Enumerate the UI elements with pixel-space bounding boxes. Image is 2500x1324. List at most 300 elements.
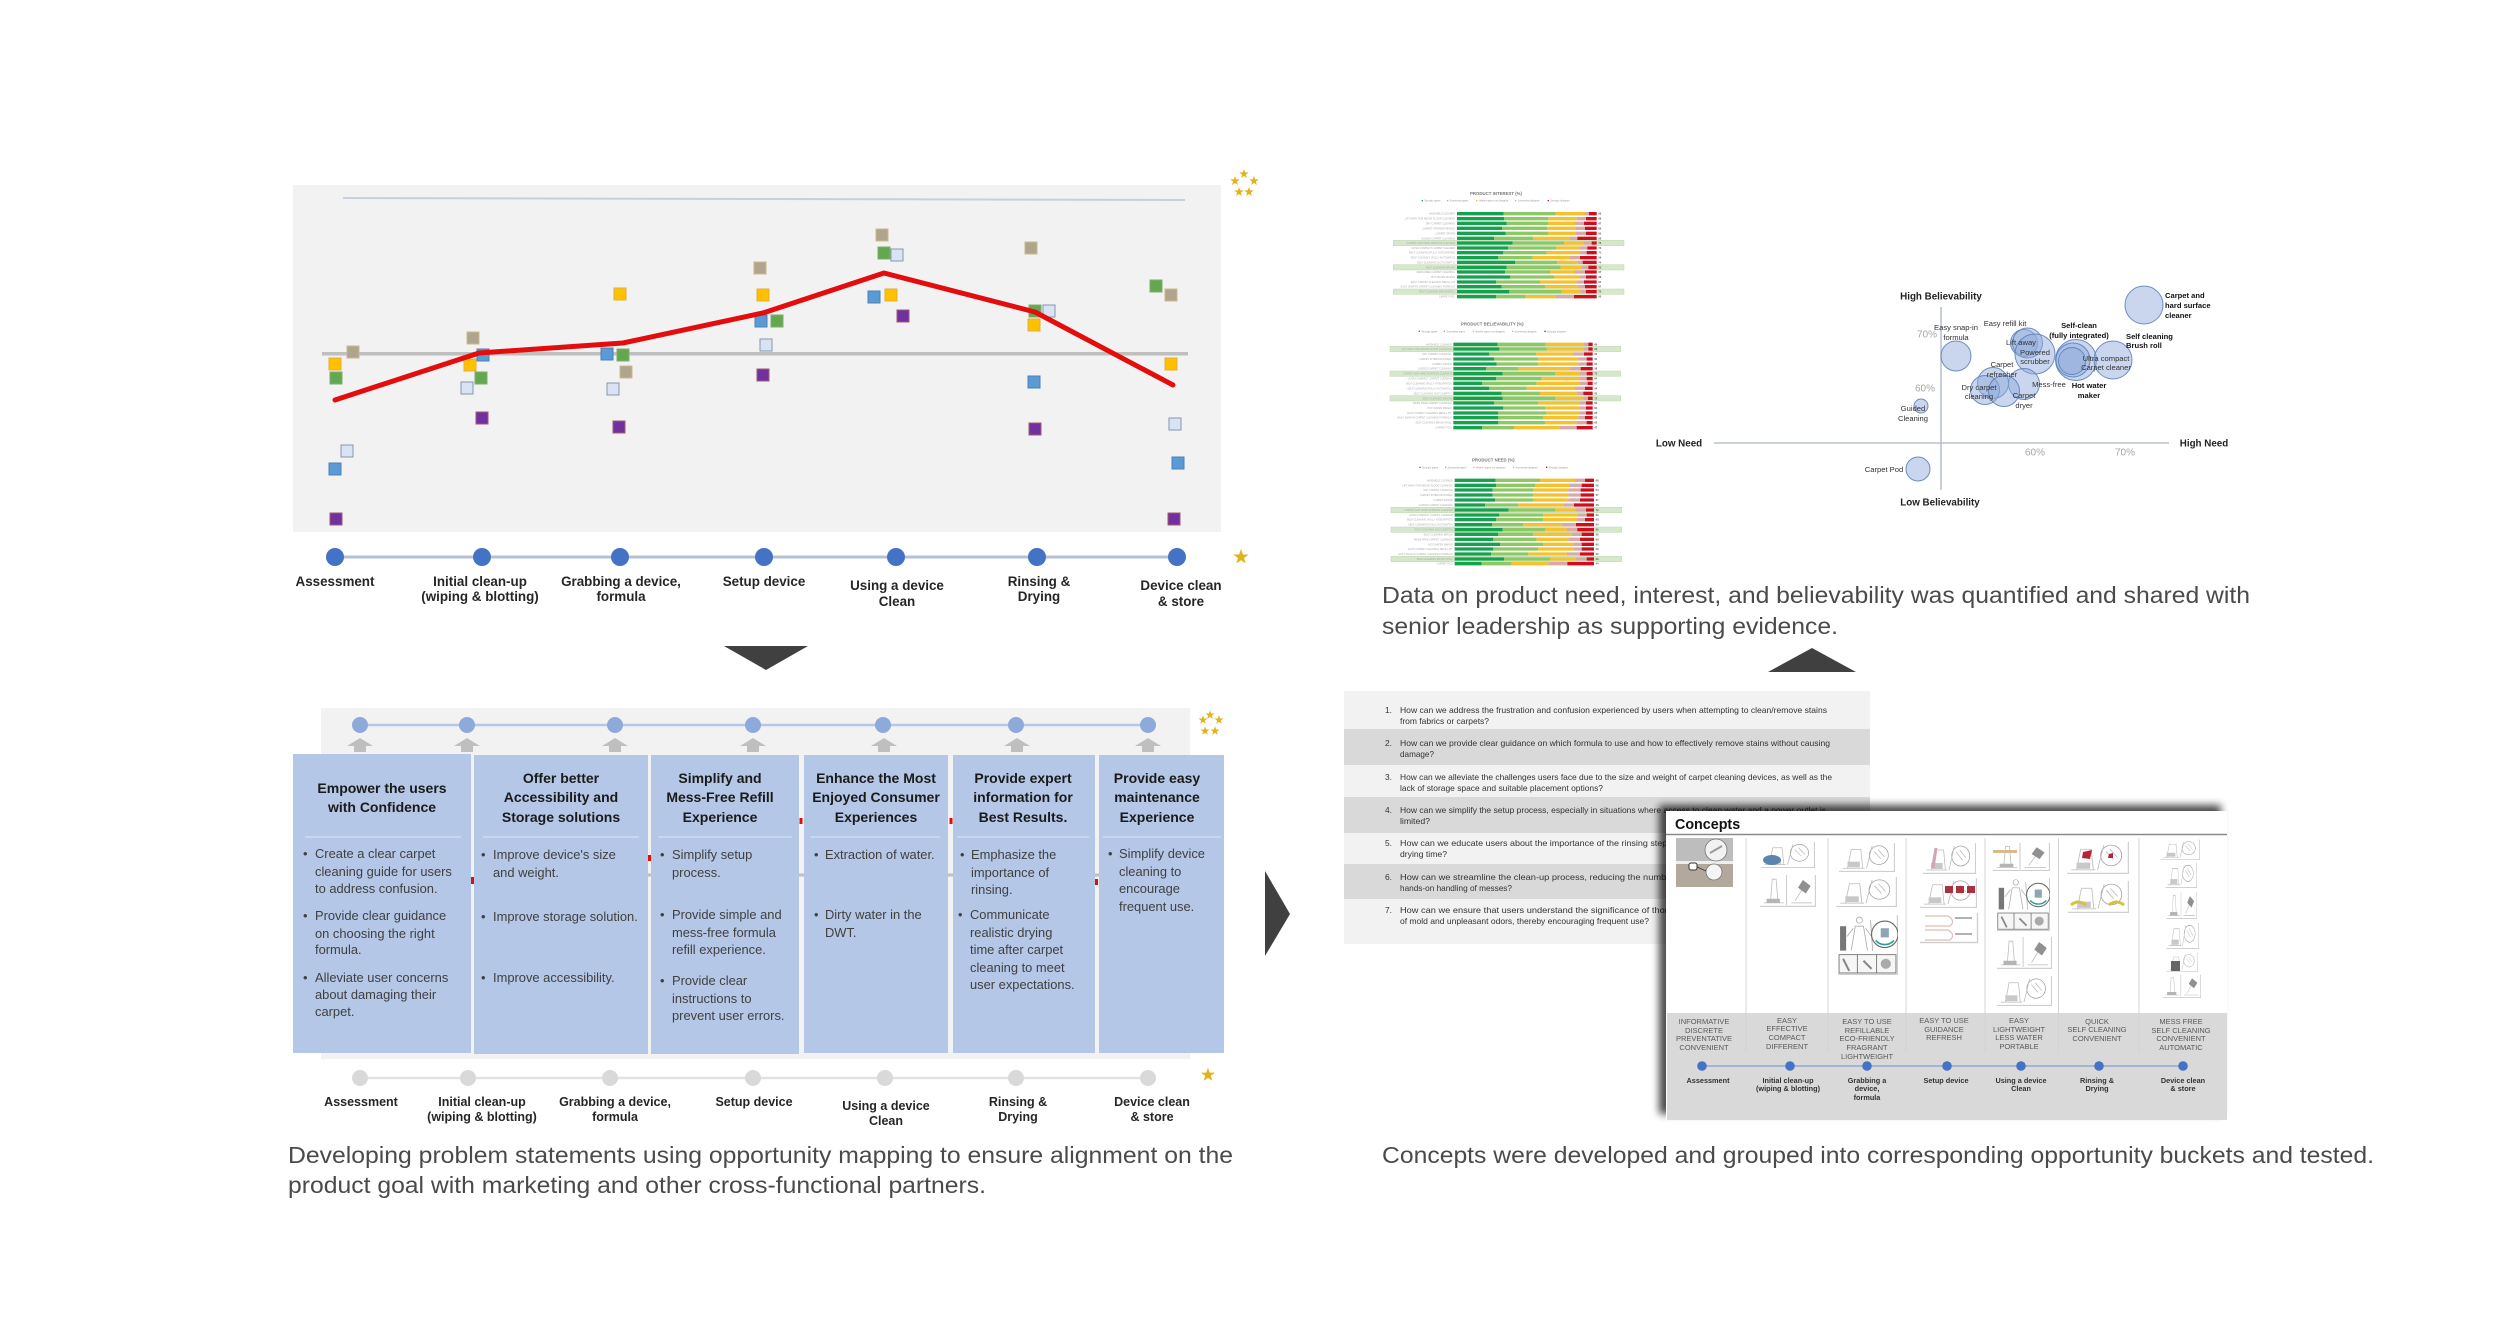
panel: simplify refill [651,755,799,1054]
chart: product believability stacked bars: 64 [1594,406,1598,410]
bullet text: Improve storage solution. [493,909,638,924]
data markers: rinsing and drying [1025,242,1055,435]
chart: product interest stacked bars: SELF CLEANING BRUSH ROLL [1419,291,1456,294]
heading: Offer better [523,770,600,786]
question 2: 2. [1385,738,1392,748]
chart: product believability stacked bars: GUIDED CARPET CLEANING [1418,368,1452,371]
question 2: How can we provide clear guidance on which formula to use and how to effectively remove stains without causing [1400,738,1830,748]
bullet text: mess-free formula [672,925,777,940]
chart reference line: top [343,198,1185,200]
journey stage labels top: Grabbing a device, [561,574,681,589]
bullet text: • [303,908,308,923]
concepts stage labels: & store [2170,1084,2196,1093]
chart: product need stacked bars: GUIDED CARPET CLEANING [1419,504,1453,507]
bullet text: Communicate [970,907,1050,922]
concepts stage labels: Setup device [1923,1076,1969,1085]
concepts stage labels: formula [1854,1093,1881,1102]
caption: data quantified: senior leadership as supporting evidence. [1382,613,1838,639]
heading: Best Results. [979,809,1067,825]
chart: product need stacked bars: SELF CLEANING BRUSH [1424,533,1453,536]
bullet text: prevent user errors. [672,1008,784,1023]
chart: product need stacked bars: 50 [1596,523,1599,527]
concepts stage labels: Assessment [1686,1076,1730,1085]
bullet text: • [481,847,486,862]
panel: expert information [953,755,1095,1053]
question 1 [1385,705,1827,726]
question 5: How can we educate users about the importance of the rinsing step and provide realistic expectations for the [1400,838,1830,848]
question 3: lack of storage space and suitable placement options? [1400,783,1603,793]
bubble labels: cleaner [2165,311,2192,320]
bullet text: • [303,846,308,861]
chart: product need stacked bars: CARPET AND HARD SURFACE CLEANER [1404,509,1453,512]
chart: product interest stacked bars: 67 [1598,221,1602,225]
chart: product believability stacked bars: 54 [1594,386,1598,390]
bullet text: DWT. [825,925,857,940]
chart: product believability stacked bars: 61 [1594,362,1598,366]
caption: opportunity mapping: product goal with marketing and other cross-functional partners. [288,1172,986,1198]
chart: product believability stacked bars: 63 [1594,391,1598,395]
chart: product need stacked bars: 60 [1596,528,1599,532]
bullet text: rinsing. [971,882,1013,897]
bubble labels: Easy snap-in [1934,323,1978,332]
panel: concepts [1666,811,2227,1120]
chart: product need stacked bars: 52 [1596,552,1599,556]
panel: easy maintenance [1099,755,1224,1053]
chart: product need stacked bars: 46 [1596,503,1599,507]
chart: product need stacked bars: EASY CARPET CLEANING REFILL KIT [1408,548,1453,551]
chart: product interest stacked bars: HANDHELD CLEANER [1429,213,1455,216]
heading: Enjoyed Consumer [812,789,940,805]
bullet text: Alleviate user concerns [315,970,448,985]
chart: product need stacked bars: 54 [1596,488,1599,492]
chart: product interest stacked bars: 74 [1598,260,1602,264]
bullet text: Create a clear carpet [315,846,436,861]
bubble labels: dryer [2015,401,2033,410]
bullet text: Simplify setup [672,847,752,862]
concept thumbnails: device clean and store [2160,839,2201,998]
journey stage labels top: Assessment [296,574,375,589]
bubble labels: Carpet Pod [1865,465,1903,474]
chart: product interest stacked bars: 76 [1598,241,1602,245]
question 5: 5. [1385,838,1392,848]
question 7 [1385,905,1830,926]
caption: opportunity mapping [288,1142,1233,1198]
heading: Simplify and [678,770,762,786]
bubble labels: Powered [2020,348,2050,357]
bullet text: • [958,907,963,922]
bullet text: Improve device's size [493,847,616,862]
concept attribute labels: LIGHTWEIGHT [1841,1052,1893,1061]
concept attribute labels: EASY TO USE [1919,1016,1969,1025]
chart: product interest stacked bars: 68 [1598,275,1602,279]
concept thumbnails: initial clean-up [1759,841,1816,907]
question 5 [1385,838,1830,859]
bubble labels: Carpet cleaner [2081,363,2131,372]
bullet text: • [660,973,665,988]
journey stage labels bottom [324,1095,1190,1128]
question 4: How can we simplify the setup process, especially in situations where access to clean water and a power outlet is [1400,805,1826,815]
heading: Accessibility and [504,789,618,805]
chart: product interest stacked bars: 61 [1598,280,1602,284]
bubble labels: Lift away [2006,338,2036,347]
chart: product believability stacked bars: HANDHELD CLEANER [1426,343,1452,346]
concept thumbnails: setup device [1919,842,1978,943]
data markers: assessment [329,346,359,525]
chart: product need stacked bars: 63 [1596,518,1599,522]
chart: product believability stacked bars: 73 [1594,372,1598,376]
question 7: How can we ensure that users understand the significance of thorough cleaning for preventing the growth [1400,905,1830,915]
heading: Provide expert [974,770,1072,786]
opportunity timeline bottom [352,1070,1156,1086]
concept attribute labels [1676,1016,2211,1061]
bubble labels: Carpet [1991,360,2014,369]
journey stage labels bottom: Device clean [1114,1095,1190,1109]
question 6: hands-on handling of messes? [1400,883,1512,893]
chart: product believability stacked bars: EASY CARPET CLEANING REFILL KIT [1407,412,1452,415]
arrow: down [724,646,808,670]
journey stage labels top: Clean [879,594,915,609]
chart: product interest stacked bars: CARPET AND HARD SURFACE CLEANER [1407,242,1455,245]
chart: product need stacked bars: EASY SNAP-IN CARPET CLEANING FORMULA [1398,553,1453,556]
question 3: 3. [1385,772,1392,782]
bullet text: process. [672,865,721,880]
chart: product believability stacked bars: 72 [1594,396,1598,400]
chart: product need stacked bars: 57 [1596,498,1599,502]
concepts stage labels [1686,1076,2205,1102]
heading: Experiences [835,809,917,825]
chart: product interest stacked bars: ULTRA COMPACT CARPET CLEANER [1411,247,1455,250]
bullet text: instructions to [672,991,752,1006]
concept attribute labels: EASY [2009,1016,2029,1025]
journey stage labels top: Using a device [850,578,944,593]
chart: product need stacked bars: HANDHELD CLEANER [1427,479,1453,482]
bullet text: • [814,907,819,922]
heading: information for [973,789,1073,805]
chart: product interest stacked bars: EASY CARPET CLEANING REFILL KIT [1411,281,1455,284]
panel shadow: concepts [1659,805,2221,1114]
bullet text: user expectations. [970,977,1075,992]
caption: opportunity mapping: Developing problem statements using opportunity mapping to ensure alignment on the [288,1142,1233,1168]
chart: product interest stacked bars: CARPET INTERIOR RINSES [1422,227,1455,230]
journey stage labels top: Setup device [723,574,805,589]
chart: product interest stacked bars: Strongly agree [1424,200,1441,203]
data markers: using a device [868,229,909,322]
chart: product need stacked bars: SELF CLEANING (AUTO EMPTY) [1415,529,1453,532]
bubble labels: refresher [1987,370,2018,379]
question 1: 1. [1385,705,1392,715]
panel: empower the users [293,754,471,1053]
bullet text: on choosing the right [315,926,435,941]
residual gray and red line fragments between columns [472,818,1099,885]
gray label band [1667,1013,2227,1120]
bullet text: importance of [971,865,1050,880]
chart: product need stacked bars: Strongly disagree [1549,466,1569,469]
bullet text: • [660,847,665,862]
journey stage labels top: Drying [1018,589,1060,604]
chart: product need stacked bars: CARPET POD [1437,563,1453,566]
chart: product believability stacked bars: 65 [1594,421,1598,425]
chart: product believability stacked bars: CARPET INTERIOR RINSES [1419,358,1452,361]
tick labels: 70% [2115,448,2135,458]
chart: product need stacked bars: 56 [1596,483,1599,487]
chart: product interest stacked bars: SELF CLEANING BRUSH [1426,266,1455,269]
bubble labels: Ultra compact [2083,354,2130,363]
question 4 [1385,805,1826,826]
chart: product need stacked bars: 59 [1596,547,1599,551]
concept attribute labels: REFILLABLE [1845,1026,1889,1035]
chart: product need stacked bars: SELF CLEANING (FULLY AUTOMATIC) [1408,524,1453,527]
chart: product believability stacked bars: Somewhat disagree [1515,330,1537,333]
chart: product interest stacked bars: HOT WATER MAKER [1431,276,1455,279]
bullet text: realistic drying [970,925,1052,940]
chart: product believability stacked bars: 60 [1594,401,1598,405]
journey stage labels top: formula [596,589,646,604]
bullet text: refill experience. [672,942,766,957]
bullet text: encourage [1119,881,1180,896]
chart: product believability stacked bars: SELF CLEANING (FULLY INTEGRATED) [1406,382,1452,385]
red trend line [335,273,1173,400]
journey stage labels bottom: Initial clean-up [438,1095,526,1109]
bullet text: Provide clear [672,973,748,988]
chart: product believability stacked bars: 66 [1594,411,1598,415]
axis labels: Low Believability [1900,498,1980,508]
bubble labels: Self-clean [2061,321,2097,330]
chart: product believability stacked bars: 69 [1594,342,1598,346]
journey stage labels bottom: Drying [998,1110,1038,1124]
bubble labels: maker [2078,391,2100,400]
concept attribute labels: EFFECTIVE [1766,1024,1808,1033]
concepts stage labels: Clean [2011,1084,2031,1093]
highlighted rows [1390,346,1621,401]
question 6: 6. [1385,872,1392,882]
chart: product interest stacked bars: Neither agree nor disagree [1479,200,1509,203]
chart: product interest stacked bars: Somewhat agree [1450,200,1469,203]
concept attribute labels: REFRESH [1926,1033,1962,1042]
journey stage labels bottom: Using a device [842,1099,930,1113]
concept thumbnails: grabbing a device [1835,842,1898,975]
bullet text: cleaning guide for users [315,864,452,879]
chart: product need stacked bars: SELF CLEANING BRUSH ROLL [1416,558,1453,561]
concept attribute labels: LESS WATER [1995,1033,2043,1042]
chart: product believability stacked bars: 64 [1594,377,1598,381]
heading: Provide easy [1114,770,1200,786]
concept attribute labels: GUIDANCE [1924,1025,1964,1034]
chart: product believability stacked bars: 67 [1594,381,1598,385]
icon: single star top timeline [1233,549,1249,563]
heading: Experience [683,809,758,825]
concept attribute labels: DIFFERENT [1766,1042,1808,1051]
bubble labels: Dry carpet [1961,383,1997,392]
bubble labels: Carpet [2013,391,2036,400]
chart: product interest stacked bars: LIFT AWAY FOR ABOVE FLOOR CLEANING [1405,218,1455,221]
chart: product interest stacked bars: GUIDED CARPET CLEANING [1421,237,1455,240]
chart: product believability stacked bars [1390,322,1621,430]
chart: product need stacked bars: HOT WATER MAKER [1429,543,1453,546]
chart: product believability stacked bars: CARPET POD [1436,427,1452,430]
bullet text: and weight. [493,865,559,880]
journey stage labels bottom: & store [1130,1110,1174,1124]
icons: gray up arrows [347,738,1161,752]
chart: product interest stacked bars: EASY SNAP-IN CARPET CLEANING FORMULA [1401,286,1455,289]
chart: product need stacked bars: LIFT AWAY FOR ABOVE FLOOR CLEANING [1402,484,1453,487]
bullet text: • [303,970,308,985]
bullet text: • [481,970,486,985]
caption: concepts developed: Concepts were developed and grouped into corresponding opportunity buckets and tested. [1382,1142,2374,1168]
heading: with Confidence [327,799,436,815]
chart: product believability stacked bars: SELF CLEANING (AUTO EMPTY) [1414,392,1452,395]
bubble labels: Carpet and [2165,291,2205,300]
journey stage labels bottom: Grabbing a device, [559,1095,671,1109]
bubble labels: Easy refill kit [1984,319,2027,328]
icon: five stars opportunity map [1198,710,1224,735]
axis labels: High Believability [1900,292,1982,302]
heading: Empower the users [317,780,447,796]
concepts stage labels: (wiping & blotting) [1756,1084,1821,1093]
heading: Storage solutions [502,809,620,825]
bubbles [1906,286,2163,481]
chart: product need stacked bars: 59 [1596,537,1599,541]
bubble labels: Cleaning [1898,414,1928,423]
concept attribute labels: EASY TO USE [1842,1017,1892,1026]
question 1: How can we address the frustration and confusion experienced by users when attempting to clean/remove stains [1400,705,1827,715]
concepts stage labels: Grabbing a [1848,1076,1887,1085]
chart: product interest stacked bars: SELF CLEANING (FULLY INTEGRATED) [1409,252,1455,255]
bullet text: cleaning to meet [970,960,1065,975]
bullet text: Provide clear guidance [315,908,446,923]
chart: product believability stacked bars: HOT WATER MAKER [1428,407,1452,410]
chart: product need stacked bars: CARPET DRYER [1433,499,1453,502]
chart: product interest stacked bars: DRY CARPET CLEANING [1426,222,1455,225]
bubble labels: Self cleaning [2126,332,2173,341]
bullet text [660,847,784,1023]
concept attribute labels: LIGHTWEIGHT [1993,1025,2045,1034]
bullet text: • [814,847,819,862]
journey stage labels bottom: formula [592,1110,639,1124]
axis labels [1656,292,2228,508]
bullet text: Simplify device [1119,846,1205,861]
bullet text: time after carpet [970,942,1064,957]
concepts stage labels: Rinsing & [2080,1076,2115,1085]
chart: product believability stacked bars: 65 [1594,416,1598,420]
concept attribute labels: QUICK [2085,1017,2109,1026]
chart: product interest stacked bars: 71 [1598,251,1602,255]
chart: product believability stacked bars: CARPET AND HARD SURFACE CLEANER [1403,373,1452,376]
chart: product need stacked bars: SELF CLEANING (FULLY INTEGRATED) [1407,519,1453,522]
question 7: 7. [1385,905,1392,915]
bullet text [814,847,935,940]
bullet text: Dirty water in the [825,907,922,922]
chart: product need stacked bars [1391,458,1622,566]
chart: product need stacked bars: ULTRA COMPACT CARPET CLEANER [1409,514,1453,517]
journey stage labels bottom: Setup device [715,1095,793,1109]
journey stage labels top: Device clean [1140,578,1222,593]
heading [666,770,774,825]
chart: product interest stacked bars: 68 [1598,217,1602,221]
chart: product interest stacked bars: MESS FREE CARPET CLEANING [1417,271,1455,274]
chart: product interest stacked bars: SELF CLEANING (FULLY AUTOMATIC) [1411,257,1455,260]
concept attribute labels: CONVENIENT [2072,1034,2122,1043]
chart: product need stacked bars: 56 [1596,532,1599,536]
chart: product interest stacked bars: PRODUCT INTEREST (%) [1470,191,1523,196]
bullet text: frequent use. [1119,899,1194,914]
bullet text: • [1108,846,1113,861]
chart: product believability stacked bars: LIFT AWAY FOR ABOVE FLOOR CLEANING [1401,348,1452,351]
concept thumbnails: rinsing and drying [2066,841,2129,913]
concept attribute labels: PORTABLE [1999,1042,2039,1051]
chart: product interest stacked bars: 56 [1598,236,1602,240]
highlighted rows [1391,507,1622,562]
chart: product need stacked bars: MESS FREE CARPET CLEANING [1414,538,1453,541]
bullet text: Emphasize the [971,847,1056,862]
bullet text [303,846,452,1019]
bubble labels: hard surface [2165,301,2211,310]
bullet text: cleaning to [1119,864,1181,879]
arrow: up [1768,648,1856,672]
chart: product believability stacked bars: 62 [1594,352,1598,356]
chart: product believability stacked bars: MESS FREE CARPET CLEANING [1413,402,1452,405]
concept attribute labels: CONVENIENT [2156,1034,2206,1043]
chart: product interest stacked bars: 59 [1598,256,1602,260]
panel: how might we questions [1344,691,1870,944]
chart: product believability stacked bars: 64 [1594,357,1598,361]
question 4: limited? [1400,816,1430,826]
journey stage labels bottom: Clean [869,1114,903,1128]
question 1: from fabrics or carpets? [1400,716,1489,726]
heading: Enhance the Most [816,770,936,786]
caption: data quantified: Data on product need, interest, and believability was quantified and shared with [1382,582,2250,608]
journey stage labels top [296,574,1222,609]
chart: product need stacked bars: 69 [1596,557,1599,561]
journey stage labels bottom: Assessment [324,1095,399,1109]
tick labels: 60% [2025,448,2045,458]
bullet text: Provide simple and [672,907,782,922]
concept attribute labels: MESS FREE [2159,1017,2203,1026]
chart: product need stacked bars: 72 [1596,508,1599,512]
bullet text: • [660,907,665,922]
chart: product need stacked bars: Strongly agree [1422,466,1439,469]
tick labels [1915,330,2135,458]
concepts stage labels: Device clean [2161,1076,2205,1085]
chart: product believability stacked bars: 69 [1594,347,1598,351]
heading [973,770,1073,825]
journey stage labels bottom: (wiping & blotting) [427,1110,537,1124]
chart: product interest stacked bars: CARPET POD [1439,296,1455,299]
bullet text [958,847,1075,992]
chart: product interest stacked bars: 65 [1598,231,1602,235]
chart: product need stacked bars: CARPET INTERIOR RINSES [1420,494,1453,497]
heading: Mess-Free Refill [666,789,774,805]
panel: journey score chart [293,185,1221,532]
bullet text: about damaging their [315,987,437,1002]
question 2 [1385,738,1830,759]
chart: product interest stacked bars: Strongly disagree [1550,200,1570,203]
bullet text: to address confusion. [315,881,438,896]
data markers: device clean and store [1150,280,1184,525]
bullet text: Improve accessibility. [493,970,615,985]
bubble labels: Guided [1901,404,1925,413]
bubble labels: cleaning [1965,392,1993,401]
chart: product need stacked bars: PRODUCT NEED (%) [1472,458,1515,463]
axis labels: High Need [2180,438,2228,450]
chart: product interest stacked bars: CARPET DRYER [1436,232,1455,235]
bullet text: carpet. [315,1004,354,1019]
chart: product believability stacked bars: SELF CLEANING BRUSH [1423,397,1452,400]
chart: product believability stacked bars: 47 [1594,426,1598,430]
chart: need vs believability bubble scatter [1656,286,2228,508]
chart: product believability stacked bars: SELF CLEANING BRUSH ROLL [1415,422,1452,425]
chart: product interest stacked bars: SELF CLEANING (AUTO EMPTY) [1417,261,1455,264]
chart: product believability stacked bars: 56 [1594,367,1598,371]
